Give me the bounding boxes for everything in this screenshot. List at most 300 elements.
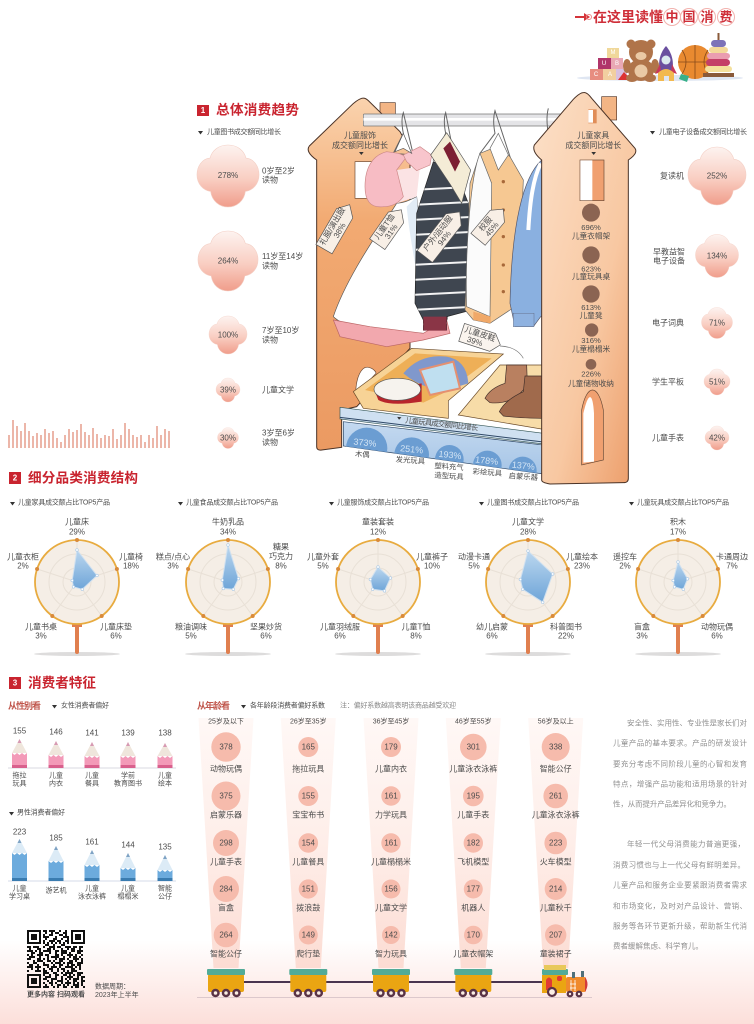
column: 26岁至35岁: 165 [302, 742, 316, 752]
radar chart: clothing [307, 498, 448, 656]
panel: by gender: 从性别看 [8, 700, 41, 711]
radar chart: food: 6% [260, 632, 272, 640]
radar chart: books: 22% [558, 632, 574, 640]
column: 56岁及以上: 火车模型 [540, 856, 572, 866]
column: 25岁及以下: 378 [219, 742, 233, 752]
heading: section 1: 1 [201, 106, 206, 115]
flower: 39%: 儿童文学 [262, 384, 294, 394]
column: 36岁至45岁: 儿童内衣 [375, 764, 407, 774]
flower: 134%: 早教益智 [653, 246, 685, 256]
radar chart: furniture: 儿童椅 [119, 552, 143, 562]
radar chart: clothing: 6% [334, 632, 346, 640]
radar chart: toys: 6% [711, 632, 723, 640]
label: clothing [332, 130, 388, 155]
pencil bars: male: 161 [85, 838, 99, 846]
column: 46岁至55岁: 儿童泳衣泳裤 [449, 764, 497, 774]
radar chart: books: 23% [574, 562, 590, 570]
price tag: 儿童皮鞋 39% [459, 323, 503, 354]
price tag: 户外/运动服 94%: 94% [436, 229, 453, 248]
commentary text: 费者缓解焦虑、科学育儿。 [613, 940, 703, 950]
commentary text: 安全性、实用性、专业性是家长们对 [627, 718, 748, 728]
header: column title: 在这里读懂 [593, 9, 663, 25]
column: 46岁至55岁: 机器人 [461, 902, 485, 912]
radar chart: books: 儿童文学 [512, 516, 544, 526]
column: 36岁至45岁 [364, 716, 418, 968]
radar chart: books: 儿童图书成交额占比TOP5产品 [487, 498, 579, 506]
toy labels: 造型玩具 [434, 470, 465, 482]
right house panel: 316% [581, 336, 601, 345]
hangers [393, 108, 548, 170]
price tag: 户外/运动服 94% [417, 206, 467, 262]
header: column title [575, 8, 734, 26]
right house panel: 儿童储物收纳 [568, 378, 614, 388]
radar chart: food: 5% [185, 632, 197, 640]
price tag: 儿童T恤 31%: 31% [383, 223, 400, 241]
flower: 30% [218, 428, 295, 448]
heading: section 3: 3 [13, 678, 18, 688]
radar chart: food: 粮油调味 [175, 622, 207, 632]
column: 56岁及以上: 207 [549, 930, 563, 940]
radar chart: furniture: 儿童床垫 [100, 622, 132, 632]
right house panel: 儿童凳 [580, 310, 603, 320]
column: 36岁至45岁: 161 [384, 792, 398, 800]
subheading: age coefficient: 各年龄段消费者偏好系数 [250, 700, 325, 710]
radar chart: clothing: 童装套装 [362, 516, 394, 526]
right house panel: 226% [581, 369, 601, 378]
radar chart: clothing: 儿童羽绒服 [320, 622, 360, 632]
commentary text: 和市场变化，及时对产品设计、营销、 [613, 900, 747, 910]
flower: 42% [652, 426, 729, 450]
right house panel: 696% [581, 223, 601, 232]
radar chart: toys [613, 498, 748, 656]
panel: children's books growth [197, 127, 303, 448]
flower: 30%: 读物 [262, 437, 278, 447]
cart 1 [207, 969, 245, 996]
pencil bars: male: 185 [49, 834, 63, 842]
column: 46岁至55岁: 301 [467, 742, 481, 752]
column: 26岁至35岁: 154 [302, 838, 316, 848]
radar chart: food: 8% [275, 562, 287, 570]
pencil bars: male: 儿童 [121, 884, 135, 892]
price tag: 儿童T恤 31% [369, 204, 409, 250]
toy labels [355, 449, 539, 482]
column: 26岁至35岁: 拨浪鼓 [296, 902, 320, 912]
column: 56岁及以上: 儿童泳衣泳裤 [532, 810, 580, 820]
column: 26岁至35岁: 拖拉玩具 [292, 764, 324, 774]
column: 56岁及以上: 261 [549, 792, 563, 800]
radar chart: furniture: 18% [123, 562, 139, 570]
icon: alphabet blocks: M [610, 50, 616, 56]
flower: 71%: 电子词典 [652, 318, 684, 328]
illustration: wardrobe with clothes [308, 93, 636, 485]
toy labels: 启蒙乐器 [508, 471, 539, 482]
radar chart: food: 糖果 [273, 542, 289, 552]
label: furniture [565, 130, 621, 155]
pencil bars: female: 内衣 [49, 778, 63, 788]
subheading: male [9, 808, 65, 816]
column: 56岁及以上: 儿童秋千 [540, 902, 572, 912]
radar chart: food: 巧克力 [269, 551, 293, 561]
column: 36岁至45岁: 36岁至45岁 [373, 716, 409, 726]
flower: 264% [198, 231, 303, 291]
radar chart: toys: 盲盒 [634, 622, 650, 632]
commentary text: 服务等各环节更新升级，帮助新生代消 [613, 920, 748, 930]
shoe box with boots [458, 365, 547, 429]
icon: basketball [678, 45, 712, 79]
radar chart: furniture: 6% [110, 632, 122, 640]
blue toy shelf: 251% [400, 443, 424, 456]
commentary text: 儿童产品和服务企业要紧跟消费者需求 [613, 880, 748, 890]
blue toy shelf: 137% [511, 459, 535, 472]
flower: 278%: 278% [218, 171, 238, 180]
column: 46岁至55岁: 46岁至55岁 [455, 716, 492, 726]
radar chart: food: 糕点/点心 [156, 552, 190, 562]
radar chart: food [156, 498, 293, 656]
price tag: 礼服/演出服 38%: 礼服/演出服 [317, 205, 347, 247]
pencil bars: female: 儿童 [85, 770, 99, 780]
left house panel [308, 98, 410, 450]
radar chart: books: 5% [468, 562, 480, 570]
header: column title: 费 [719, 10, 733, 24]
radar chart: books: 动漫卡通 [458, 552, 490, 562]
flower: 264%: 11岁至14岁 [262, 251, 303, 261]
column: 25岁及以下: 启蒙乐器 [210, 810, 242, 820]
column: 26岁至35岁: 爬行垫 [296, 948, 320, 958]
right house panel: 613% [581, 303, 601, 312]
decorative sound-wave bars [8, 420, 170, 448]
pencil bars: female: 儿童 [49, 770, 63, 780]
flower: 278%: 读物 [262, 174, 278, 184]
pencil bars: male: 榻榻米 [118, 892, 138, 900]
radar chart: books: 儿童绘本 [566, 552, 598, 562]
data period note [95, 982, 139, 999]
icon: alphabet blocks [590, 48, 627, 80]
column: 25岁及以下: 264 [219, 930, 233, 940]
column: 56岁及以上: 智能公仔 [540, 764, 572, 774]
icon: alphabet blocks: A [608, 72, 612, 78]
radar chart: books: 6% [486, 632, 498, 640]
clothes rail [363, 114, 593, 126]
column: 25岁及以下: 智能公仔 [210, 948, 242, 958]
flower: 30%: 3岁至6岁 [262, 428, 295, 438]
pencil bars: female: 141 [85, 728, 99, 738]
column: 26岁至35岁: 儿童餐具 [292, 856, 324, 866]
data period note: 数据周期： [95, 982, 130, 990]
price tag: 校服 45%: 校服 [476, 214, 494, 233]
column: 46岁至55岁: 儿童手表 [457, 810, 489, 820]
subheading: books: 儿童图书成交额同比增长 [207, 127, 281, 136]
commentary text: 儿童产品的基本要求。产品的研发设计 [613, 738, 748, 748]
radar chart: furniture: 29% [69, 528, 85, 536]
column: 46岁至55岁: 177 [467, 884, 481, 894]
flower: 51%: 51% [709, 378, 725, 386]
price tag: 礼服/演出服 38%: 38% [332, 221, 348, 240]
column: 46岁至55岁: 170 [467, 930, 481, 940]
pencil bars: male: 儿童 [85, 884, 99, 892]
pencil bars: male: 泳衣泳裤 [78, 892, 106, 900]
striped jacket [414, 132, 471, 331]
radar chart: food: 坚果炒货 [250, 622, 282, 632]
right house panel: 623% [581, 264, 601, 273]
icon: teddy bear [623, 40, 659, 82]
background tint at page bottom [0, 940, 754, 1024]
column: 25岁及以下: 375 [219, 792, 233, 800]
radar chart: toys: 儿童玩具成交额占比TOP5产品 [637, 498, 729, 506]
heading: section 2: 2 [13, 474, 18, 482]
flower: 39%: 39% [220, 386, 236, 394]
price tag: 户外/运动服 94%: 户外/运动服 [421, 213, 454, 253]
price tag: 儿童T恤 31%: 儿童T恤 [372, 212, 396, 241]
pencil bars: female: 139 [121, 728, 135, 738]
right house panel [534, 93, 636, 484]
column: 56岁及以上: 223 [549, 838, 563, 848]
column: 36岁至45岁: 智力玩具 [375, 948, 407, 958]
column: 25岁及以下: 25岁及以下 [208, 716, 244, 726]
label: clothing: 儿童服饰 [344, 130, 376, 140]
radar chart: furniture: 儿童衣柜 [7, 552, 39, 562]
toy labels: 彩绘玩具 [472, 467, 503, 478]
radar chart: furniture [7, 498, 143, 656]
panel: by gender [8, 700, 176, 900]
pencil bars: male: 学习桌 [9, 892, 30, 900]
column: 36岁至45岁: 儿童文学 [375, 902, 407, 912]
radar chart: food: 3% [167, 562, 179, 570]
flower: 100% [209, 316, 299, 354]
label: clothing: 成交额同比增长 [332, 140, 388, 150]
column: 36岁至45岁: 儿童榻榻米 [371, 856, 411, 866]
column: 26岁至35岁: 26岁至35岁 [290, 716, 327, 726]
commentary text: 要充分考虑不同阶段儿童的心智和发育 [613, 758, 748, 768]
blue toy shelf: 193% [438, 449, 462, 461]
radar chart: toys: 2% [619, 562, 631, 570]
radar chart: food: 牛奶乳品 [212, 516, 244, 526]
pencil bars: male: 儿童 [12, 884, 26, 892]
flower: 252% [660, 147, 746, 205]
pencil bars: male [8, 828, 176, 900]
icon: alphabet blocks: C [594, 72, 599, 78]
radar chart: clothing: 儿童T恤 [402, 622, 430, 632]
column: 56岁及以上 [528, 716, 583, 968]
toy labels: 塑料充气 [434, 461, 465, 472]
column: 26岁至35岁: 149 [302, 930, 316, 940]
blue jacket [510, 160, 547, 327]
radar chart: toys: 动物玩偶 [701, 622, 733, 632]
data period note: 2023年上半年 [95, 990, 139, 999]
flower: 278%: 0岁至2岁 [262, 166, 295, 176]
pencil bars: female: 儿童 [158, 770, 172, 780]
column: 26岁至35岁: 宝宝布书 [292, 810, 324, 820]
radar chart: books [458, 498, 598, 656]
column: 26岁至35岁: 151 [302, 884, 316, 894]
header: column title: 中 [665, 10, 679, 24]
pencil bars: female: 学前 [121, 770, 135, 780]
note: 注：偏好系数越高表明该商品越受欢迎 [340, 700, 456, 710]
radar chart: clothing: 儿童裤子 [416, 552, 448, 562]
flower: 100%: 100% [218, 330, 238, 340]
panel: electronics growth [650, 127, 747, 450]
subheading: electronics: 儿童电子设备成交额同比增长 [659, 127, 747, 136]
pencil bars: female: 146 [49, 728, 63, 736]
column: 46岁至55岁: 飞机模型 [457, 856, 489, 866]
column: 25岁及以下: 动物玩偶 [210, 764, 242, 774]
subheading: age coefficient [241, 700, 325, 710]
column: 46岁至55岁 [446, 716, 501, 968]
pencil bars: male: 223 [13, 828, 27, 836]
illustration: toys [577, 33, 743, 82]
flower: 134%: 电子设备 [653, 256, 685, 266]
pencil bars: male: 智能 [158, 884, 172, 892]
flower: 134%: 134% [707, 252, 727, 260]
pencil bars: female: 玩具 [12, 780, 26, 788]
right house panel: 儿童榻榻米 [572, 343, 610, 353]
panel: by age [197, 700, 592, 998]
column: 36岁至45岁: 142 [384, 930, 398, 940]
pencil bars: female: 绘本 [158, 778, 172, 788]
locomotive [542, 965, 588, 996]
flower: 71% [652, 308, 732, 338]
radar chart: books: 幼儿启蒙 [476, 622, 508, 632]
column: 36岁至45岁: 力学玩具 [375, 810, 407, 820]
price tag: 儿童皮鞋 39%: 39% [466, 335, 484, 348]
commentary text: 性，从而提升产品差异化和竞争力。 [613, 798, 731, 808]
toy labels: 发光玩具 [395, 455, 426, 466]
radar chart: clothing: 儿童外套 [307, 552, 339, 562]
column: 26岁至35岁: 155 [302, 792, 316, 800]
flower: 51%: 学生平板 [652, 376, 684, 386]
subheading: books [198, 127, 281, 136]
column: 25岁及以下: 284 [219, 884, 233, 894]
column: 46岁至55岁: 195 [467, 792, 481, 800]
radar chart: toys: 卡通周边 [716, 552, 748, 562]
QR caption: 更多内容 扫码观看 [27, 990, 85, 998]
blue toy shelf [340, 407, 543, 485]
pencil bars: female: 拖拉 [12, 770, 26, 780]
pencil bars: female: 教育图书 [114, 778, 142, 788]
column: 36岁至45岁: 156 [384, 884, 398, 894]
flower: 278% [197, 145, 295, 207]
radar chart: clothing: 8% [410, 632, 422, 640]
pencil bars: female: 餐具 [85, 778, 99, 788]
radar chart: furniture: 3% [35, 632, 47, 640]
column: 36岁至45岁: 161 [384, 838, 398, 848]
icon: rocket [655, 46, 677, 81]
pencil bars: male: 公仔 [158, 892, 172, 900]
column: 46岁至55岁: 182 [467, 838, 481, 848]
storage bin with toys [353, 348, 503, 418]
header: column title: 国 [682, 10, 696, 24]
radar chart: books: 科普图书 [550, 622, 582, 632]
subheading: female: 女性消费者偏好 [61, 700, 109, 710]
heading: section 2: 细分品类消费结构 [28, 470, 138, 486]
dress [333, 133, 450, 347]
pencil bars: female: 138 [158, 728, 172, 738]
pencil bars: male: 游艺机 [46, 886, 66, 894]
furniture ranks [582, 204, 600, 370]
QR code [27, 930, 85, 988]
flower: 252%: 复读机 [660, 170, 684, 180]
train [197, 965, 592, 998]
radar chart: toys: 遥控车 [613, 552, 637, 562]
radar chart: books: 28% [520, 528, 536, 536]
pencil bars: male: 135 [158, 842, 172, 852]
toy domes [346, 428, 537, 473]
baseball cardigan [465, 133, 523, 323]
price tag: 校服 45% [471, 203, 510, 245]
commentary text [613, 718, 748, 950]
flower: 42%: 42% [709, 434, 725, 442]
radar chart: clothing: 儿童服饰成交额占比TOP5产品 [337, 498, 429, 506]
cart 4 [454, 969, 492, 996]
shelf heading: 儿童玩具成交额同比增长 [405, 416, 479, 433]
flower: 71%: 71% [709, 318, 725, 328]
flower: 39% [216, 378, 294, 402]
pencil bars: male: 144 [121, 840, 135, 850]
cart 2 [289, 969, 327, 996]
flower: 30%: 30% [220, 434, 236, 442]
heading: section 1: 总体消费趋势 [216, 102, 299, 118]
cart 3 [372, 969, 410, 996]
radar chart: clothing: 5% [317, 562, 329, 570]
flower: 134% [653, 234, 738, 278]
subheading: female [52, 700, 109, 710]
flower: 264%: 读物 [262, 260, 278, 270]
radar chart: furniture: 儿童书桌 [25, 622, 57, 632]
icon: stacking rings [703, 33, 734, 77]
price tag: 礼服/演出服 38% [316, 200, 358, 254]
subheading: male: 男性消费者偏好 [17, 808, 65, 816]
radar chart: toys: 7% [726, 562, 738, 570]
radar chart: furniture: 儿童家具成交额占比TOP5产品 [18, 498, 110, 506]
column: 56岁及以上: 338 [549, 742, 563, 752]
column: 25岁及以下 [198, 716, 254, 968]
radar chart: furniture: 2% [17, 562, 29, 570]
icon: alphabet blocks: U [602, 61, 606, 67]
radar chart: toys: 3% [636, 632, 648, 640]
column: 36岁至45岁: 179 [384, 742, 398, 752]
commentary text: 特点，增强产品功能和适用场景的针对 [613, 778, 748, 788]
price tag: 校服 45%: 45% [483, 220, 501, 238]
header: column title: 消 [700, 10, 714, 24]
column: 56岁及以上: 童装裙子 [540, 948, 572, 958]
commentary text: 消费习惯也与上一代父母有鲜明差异。 [613, 860, 745, 870]
flower: 51% [652, 369, 730, 395]
radar chart: furniture: 儿童床 [65, 516, 89, 526]
commentary text: 年轻一代父母消费能力普遍更强， [627, 838, 745, 848]
icon: alphabet blocks: B [615, 61, 619, 67]
blue toy shelf: 178% [475, 454, 499, 467]
pencil bars: female [8, 726, 176, 788]
label: furniture: 成交额同比增长 [565, 140, 621, 150]
radar chart: clothing: 12% [370, 528, 386, 536]
flower: 264%: 264% [218, 256, 238, 266]
toy labels: 木偶 [355, 449, 370, 459]
radar chart: food: 34% [220, 528, 236, 536]
flower: 42%: 儿童手表 [652, 432, 684, 442]
pencil bars: female: 155 [13, 726, 27, 736]
radar chart: clothing: 10% [424, 562, 440, 570]
icon: arrow [575, 13, 592, 21]
column: 46岁至55岁: 儿童衣帽架 [453, 948, 493, 958]
column: 56岁及以上: 56岁及以上 [538, 716, 574, 726]
right house panel: 儿童玩具桌 [572, 271, 610, 281]
blue toy shelf: 373% [353, 436, 377, 449]
flower: 252%: 252% [707, 172, 727, 180]
column: 26岁至35岁 [281, 716, 336, 968]
flower: 100%: 读物 [262, 334, 278, 344]
flower: 100%: 7岁至10岁 [262, 325, 299, 335]
column: 25岁及以下: 298 [219, 838, 233, 848]
heading: section 3: 消费者特征 [28, 674, 96, 690]
